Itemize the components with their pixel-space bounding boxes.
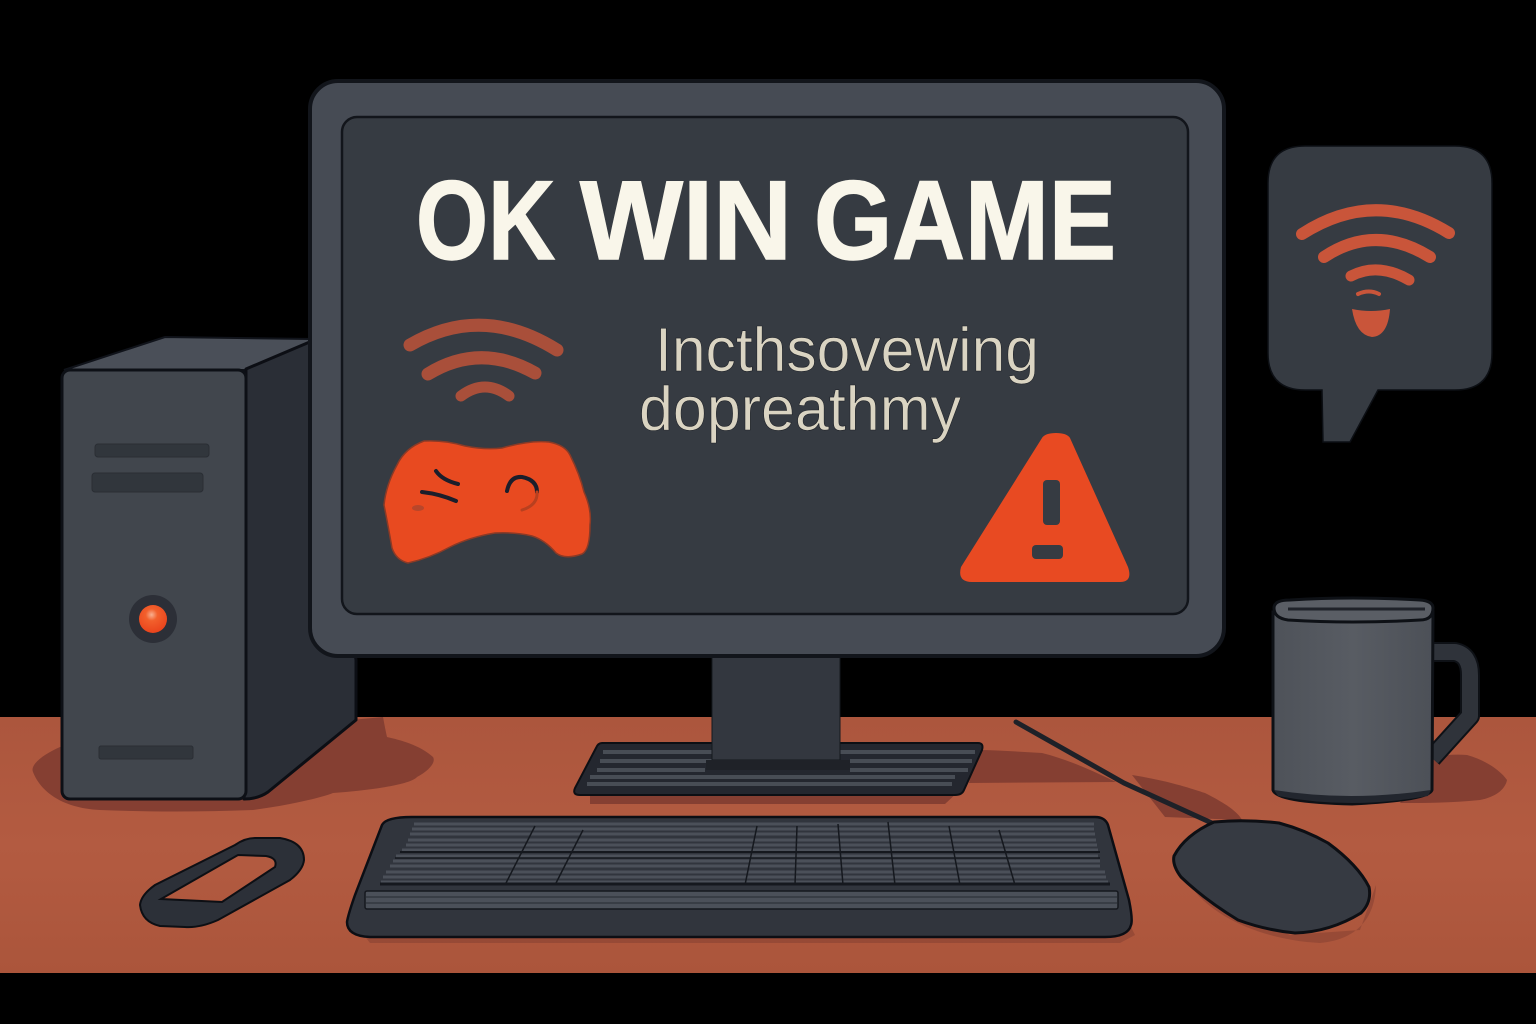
- speech bubble with wifi icon: [1268, 146, 1492, 442]
- title: GAME: [814, 158, 1116, 283]
- stand base: [574, 743, 982, 795]
- tower front face: [62, 370, 246, 799]
- icon: wifi in bubble: [1302, 210, 1449, 337]
- drive slots: [92, 444, 209, 759]
- icon: game controller: [384, 441, 590, 563]
- power button: [129, 595, 177, 643]
- garbled text block: dopreathmy: [639, 375, 961, 444]
- space bar row: [365, 891, 1118, 909]
- computer tower: [62, 337, 356, 799]
- bubble body: [1268, 146, 1492, 442]
- mug base: [1274, 790, 1431, 803]
- desk shadows: [33, 717, 1507, 943]
- icon: warning triangle: [960, 433, 1129, 582]
- coffee mug: [1273, 598, 1470, 804]
- monitor screen: [342, 117, 1188, 614]
- tower top face: [64, 337, 312, 370]
- desk: [0, 717, 1536, 973]
- keyboard: [347, 817, 1132, 937]
- stand collar: [706, 760, 850, 770]
- monitor: [310, 81, 1224, 656]
- key rows: [381, 824, 1108, 882]
- mouse cable: [1016, 722, 1214, 824]
- title: WIN: [580, 158, 792, 283]
- mouse: [1174, 821, 1370, 933]
- USB dongle ring: [140, 838, 304, 927]
- mug body: [1273, 612, 1433, 804]
- stand neck: [712, 650, 840, 760]
- tower side face: [244, 341, 356, 799]
- monitor stand: [574, 650, 982, 795]
- icon: wifi on screen: [410, 325, 557, 396]
- key separators: [380, 822, 1110, 885]
- garbled text block: [639, 316, 1039, 444]
- mug handle: [1430, 652, 1470, 758]
- keyboard body: [347, 817, 1132, 937]
- monitor bezel: [310, 81, 1224, 656]
- garbled text block: Incthsovewing: [655, 316, 1039, 385]
- mug rim: [1274, 598, 1433, 622]
- title: OK: [416, 158, 555, 283]
- title: [416, 158, 1116, 283]
